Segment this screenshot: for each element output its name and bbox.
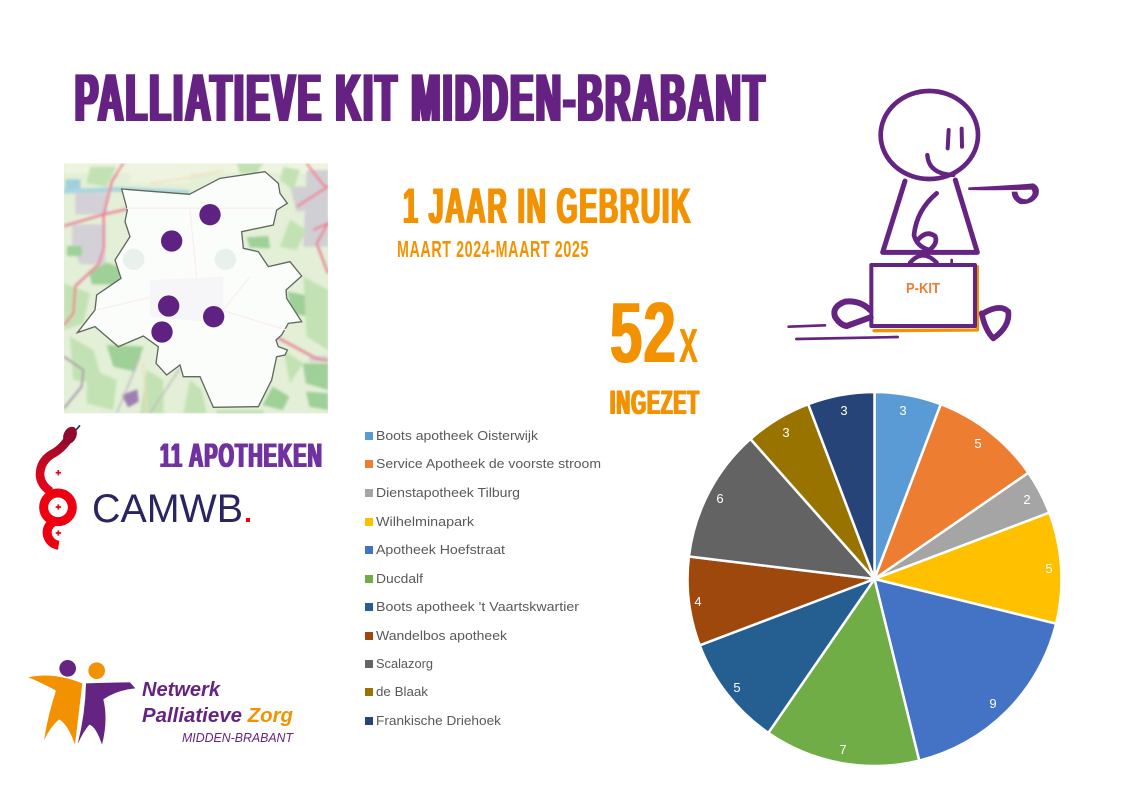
map of Midden-Brabant <box>64 163 328 415</box>
legend: Frankische Driehoek <box>376 714 502 728</box>
region outline <box>77 172 302 407</box>
wordmark dot <box>246 518 250 522</box>
orange box shadow <box>874 267 977 331</box>
P-kit label: P-KIT <box>906 281 940 297</box>
snake icon <box>40 424 80 545</box>
CAMWB wordmark: CAMWB <box>92 487 243 531</box>
pie value labels: 2 <box>1023 492 1031 507</box>
pie value labels: 5 <box>1045 561 1053 576</box>
subtitle: 1 jaar in gebruik: 1 JAAR IN GEBRUIK <box>403 178 692 234</box>
pie value labels <box>694 403 1053 757</box>
logo text: Midden-Brabant: MIDDEN-BRABANT <box>182 730 294 745</box>
CAMWB logo <box>40 424 250 545</box>
legend: Boots apotheek 't Vaartskwartier <box>376 600 579 614</box>
legend: Apotheek Hoefstraat <box>376 543 506 557</box>
legend: Wandelbos apotheek <box>376 629 508 643</box>
label: ingezet: INGEZET <box>610 384 700 422</box>
pie value labels: 3 <box>840 403 848 418</box>
legend: Scalazorg <box>376 657 433 671</box>
faded location dots <box>123 249 236 270</box>
label: 11 apotheken: 11 APOTHEKEN <box>160 437 323 475</box>
pie value labels: 6 <box>716 491 724 506</box>
pie value labels: 9 <box>989 696 997 711</box>
location dots <box>151 204 224 343</box>
legend <box>365 429 601 728</box>
logo figures <box>28 660 135 745</box>
pointing hand <box>968 183 1039 204</box>
pie value labels: 3 <box>899 403 907 418</box>
logo text: Netwerk: Netwerk <box>142 679 221 701</box>
count: 52x: 52 <box>610 286 677 381</box>
legend: Boots apotheek Oisterwijk <box>376 429 539 443</box>
pie value labels: 5 <box>733 680 741 695</box>
legend: de Blaak <box>376 685 429 699</box>
pie value labels: 5 <box>974 436 982 451</box>
pie value labels: 4 <box>694 594 702 609</box>
legend: Dienstapotheek Tilburg <box>376 486 520 500</box>
Netwerk Palliatieve Zorg logo <box>28 660 294 745</box>
pie chart <box>688 392 1061 766</box>
period label: MAART 2024-MAART 2025 <box>397 236 589 262</box>
legend: Service Apotheek de voorste stroom <box>376 457 601 471</box>
pie value labels: 3 <box>782 425 790 440</box>
illustration: figure with P-kit <box>789 91 1039 339</box>
pie value labels: 7 <box>839 742 847 757</box>
legend: Ducdalf <box>376 572 424 586</box>
legend: Wilhelminapark <box>376 515 475 529</box>
count suffix: x <box>679 307 698 376</box>
logo text: Palliatieve Zorg: Palliatieve Zorg <box>142 705 293 727</box>
